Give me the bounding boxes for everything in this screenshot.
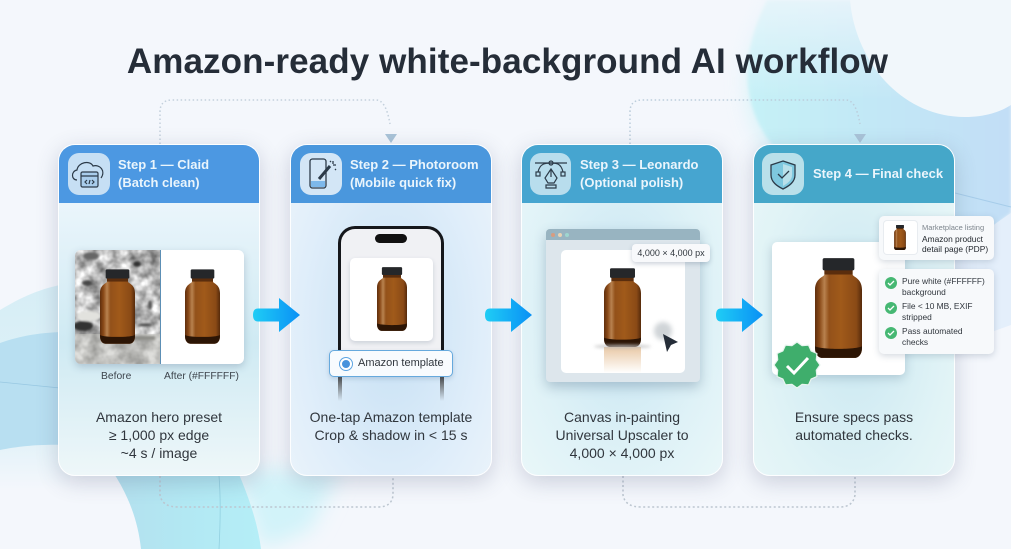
step 2 text: Crop & shadow in < 15 s <box>315 427 467 443</box>
step 3 heading: Step 3 — Leonardo <box>580 157 698 172</box>
after label: After (#FFFFFF) <box>164 371 239 382</box>
step 3 text: Canvas in-painting <box>564 409 680 425</box>
icon: pen tool <box>530 153 571 195</box>
icon: shield check <box>762 153 804 195</box>
check 2: File < 10 MB, EXIF <box>902 301 973 311</box>
amazon template pill: Amazon template <box>358 357 444 369</box>
check 3: Pass automated <box>902 326 963 336</box>
step 3 text: Universal Upscaler to <box>555 427 689 443</box>
icon: cloud code <box>68 153 110 195</box>
step 2 header <box>291 145 491 203</box>
step 1 heading: Step 1 — Claid <box>118 157 209 172</box>
step 3 text <box>555 409 689 461</box>
check 2 <box>885 301 973 322</box>
before label: Before <box>101 371 131 382</box>
step 4 text <box>795 409 913 443</box>
step 1 heading: (Batch clean) <box>118 175 200 190</box>
arrow: step 3 to step 4 <box>716 298 763 332</box>
connector: step 3 to step 4 lower <box>623 476 855 507</box>
step 3 heading: (Optional polish) <box>580 175 683 190</box>
arrow: step 2 to step 3 <box>485 298 532 332</box>
product image <box>772 242 905 375</box>
reflection <box>604 347 641 373</box>
step 1 text: ~4 s / image <box>121 445 197 461</box>
check 1 <box>885 276 985 296</box>
arrow: step 1 to step 2 <box>253 298 300 332</box>
icon: green approval badge <box>774 342 820 388</box>
step 3 header <box>522 145 722 203</box>
listing text: Marketplace listing <box>922 223 984 232</box>
step 3 text: 4,000 × 4,000 px <box>570 445 674 461</box>
listing text <box>922 223 988 254</box>
check 1: Pure white (#FFFFFF) <box>902 276 985 286</box>
step 4 header <box>754 145 954 203</box>
marketplace listing card <box>879 216 994 260</box>
size tag: 4,000 × 4,000 px <box>637 248 705 258</box>
step 1 text: ≥ 1,000 px edge <box>109 427 209 443</box>
icon: cursor <box>652 320 678 352</box>
product tile <box>350 258 433 341</box>
checklist card <box>879 269 994 354</box>
phone mockup <box>338 226 444 400</box>
step 4 text: Ensure specs pass <box>795 409 913 425</box>
step 2 text: One-tap Amazon template <box>310 409 472 425</box>
canvas window <box>546 229 700 382</box>
panel: step 2 <box>290 144 492 476</box>
title: Amazon-ready white-background AI workflow <box>127 42 888 81</box>
check 2: stripped <box>902 312 932 322</box>
check 3 <box>885 326 963 346</box>
step 4 heading: Step 4 — Final check <box>813 166 943 181</box>
connector: step 3 to step 4 <box>630 100 860 144</box>
step 2 text <box>310 409 472 443</box>
step 2 heading <box>350 157 479 190</box>
connector: step 1 to step 2 <box>160 100 390 144</box>
connector arrowheads <box>385 134 866 143</box>
check 3: checks <box>902 336 928 346</box>
panel: step 4 <box>753 144 955 476</box>
step 1 heading <box>118 157 209 190</box>
step 1 text <box>96 409 222 461</box>
step 2 heading: (Mobile quick fix) <box>350 175 456 190</box>
listing text: Amazon product <box>922 234 983 244</box>
step 4 text: automated checks. <box>795 427 913 443</box>
step 1 text: Amazon hero preset <box>96 409 222 425</box>
canvas image <box>561 250 685 373</box>
amazon template pill <box>329 350 453 377</box>
panel: step 3 <box>521 144 723 476</box>
listing text: detail page (PDP) <box>922 244 988 254</box>
size tag <box>632 244 710 262</box>
step 3 heading <box>580 157 698 190</box>
check 1: background <box>902 286 946 296</box>
icon: phone wand <box>300 153 342 195</box>
before and after image <box>74 250 244 364</box>
panel: step 1 <box>58 144 260 476</box>
listing thumbnail <box>884 221 917 254</box>
step 1 header <box>59 145 259 203</box>
radio button <box>340 358 352 370</box>
connector: step 1 to step 2 lower <box>160 476 393 507</box>
step 2 heading: Step 2 — Photoroom <box>350 157 479 172</box>
